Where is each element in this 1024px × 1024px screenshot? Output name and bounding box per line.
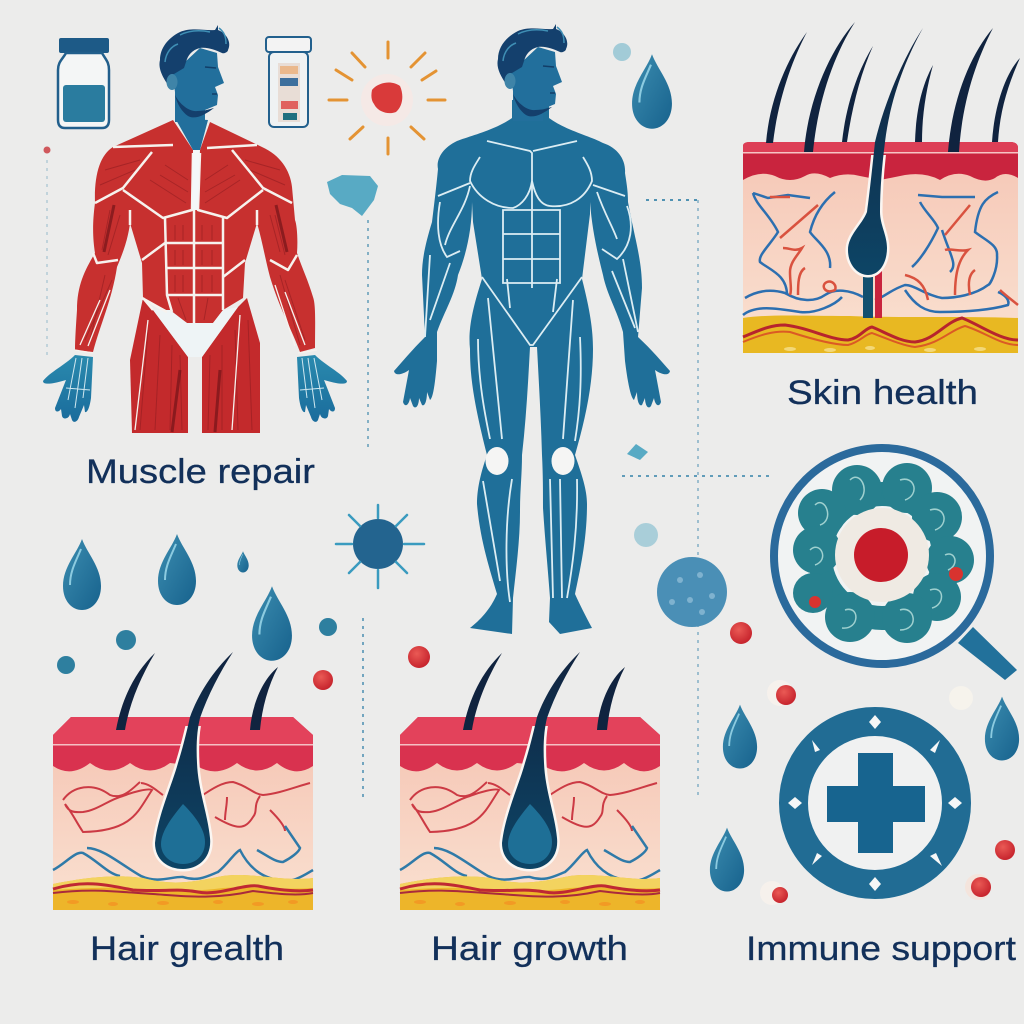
teal cell blobs: [793, 463, 974, 643]
neck: [175, 118, 208, 150]
label: skin health: Skin health: [787, 374, 978, 412]
head: [497, 24, 567, 121]
body lines: [425, 141, 638, 602]
panel: skin top right: [743, 22, 1020, 353]
main hair follicle outline: [848, 142, 887, 275]
blob squiggles: [810, 477, 955, 630]
left leg: [130, 298, 188, 433]
icon: left hand: [43, 355, 93, 422]
icon: medical cross ring: [788, 715, 962, 891]
head: [159, 25, 229, 122]
red dots: [44, 146, 1015, 905]
muscle lines: [75, 145, 317, 430]
icon: vial right: [266, 37, 311, 127]
connector lines: [47, 160, 770, 800]
left knee: [486, 447, 508, 475]
small cell clusters: [327, 43, 658, 547]
hair strands: [766, 22, 1020, 152]
label: hair growth: Hair growth: [431, 930, 628, 968]
panel: magnifier: [774, 448, 1017, 680]
muscle fibres: [85, 160, 305, 430]
icon: vial left: [58, 38, 109, 128]
central blue body: [394, 24, 670, 634]
body silhouette: [394, 100, 670, 634]
label: immune support: Immune support: [746, 930, 1017, 968]
main hair follicle: [848, 28, 923, 275]
right knee: [552, 447, 574, 475]
icon: right hand: [297, 355, 347, 422]
label: hair grealth: Hair grealth: [90, 930, 284, 968]
water drops: [57, 54, 1019, 891]
muscle figure: [43, 25, 347, 433]
label: muscle repair: Muscle repair: [86, 453, 315, 491]
icon: blue virus: [336, 505, 424, 588]
textured blue cell: [657, 557, 727, 627]
panel: skin bottom left: [53, 652, 313, 910]
torso and arms: [75, 120, 315, 352]
right leg: [202, 298, 260, 433]
panel: skin bottom middle: [400, 652, 660, 910]
neck and pelvis highlight: [153, 307, 238, 357]
icon: sun cell: [329, 42, 445, 154]
